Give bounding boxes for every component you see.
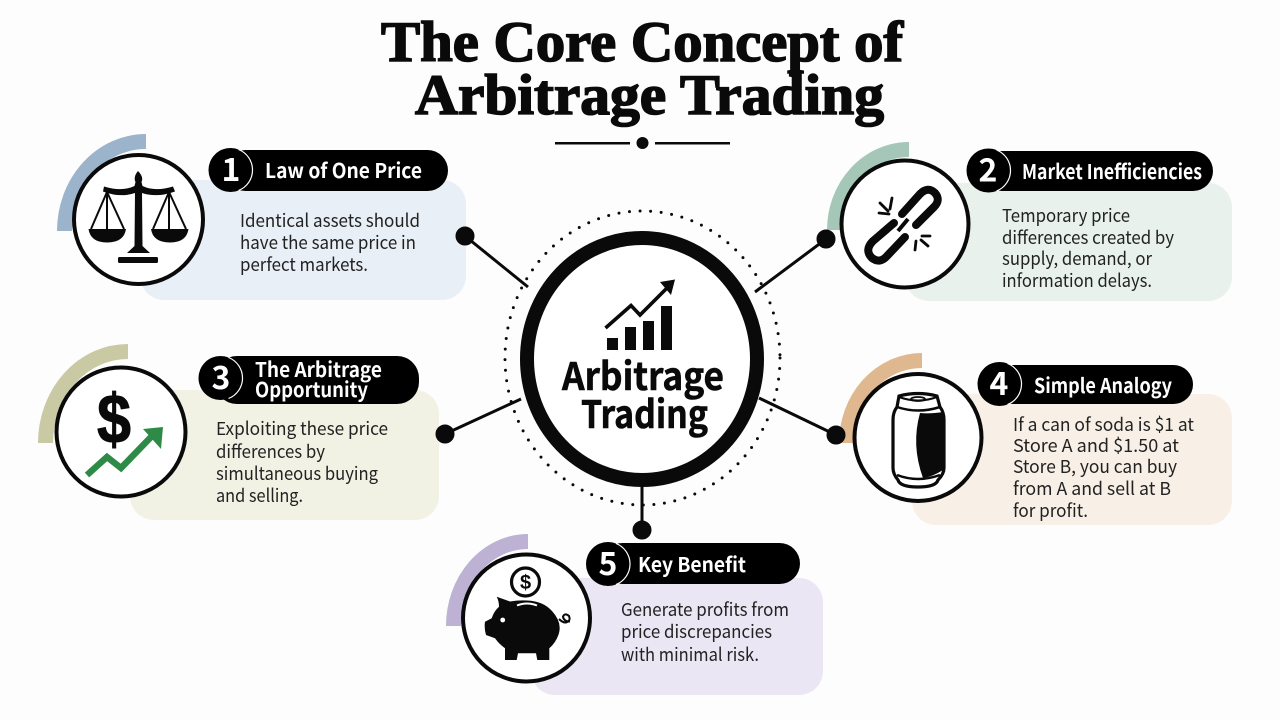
body text — [1002, 202, 1175, 293]
heading pill: Market Inefficiencies — [1022, 155, 1202, 185]
heading pill — [966, 146, 1213, 192]
heading pill — [978, 359, 1193, 406]
accent arc — [834, 150, 909, 230]
accent arc — [454, 542, 528, 626]
card — [912, 394, 1232, 525]
body text — [240, 207, 420, 277]
connector lines — [437, 228, 844, 538]
accent arc — [46, 352, 128, 443]
heading pill: Opportunity — [255, 373, 368, 403]
body text: from A and sell at B — [1013, 475, 1171, 501]
body text — [216, 415, 388, 508]
heading pill: Key Benefit — [638, 548, 746, 578]
heading pill: 3 — [212, 353, 230, 399]
icon: soda can — [854, 374, 982, 501]
body text: and selling. — [216, 482, 303, 508]
hub label: Arbitrage — [561, 346, 724, 401]
title: Arbitrage Trading — [415, 64, 884, 127]
body text: price discrepancies — [621, 618, 772, 644]
heading pill: The Arbitrage — [255, 353, 382, 383]
panel 2: Market Inefficiencies — [834, 146, 1232, 301]
body text: Generate profits from — [621, 596, 789, 622]
icon: piggy bank — [463, 554, 590, 682]
body text: If a can of soda is $1 at — [1013, 411, 1194, 437]
body text: Identical assets should — [240, 207, 420, 233]
body text: perfect markets. — [240, 251, 368, 277]
body text: Store A and $1.50 at — [1013, 432, 1179, 458]
card — [140, 180, 466, 300]
panel 3: The Arbitrage Opportunity — [46, 352, 439, 520]
body text: for profit. — [1013, 497, 1088, 523]
panel 1: Law of One Price — [64, 142, 466, 300]
icon: piggy bank: $ — [520, 572, 531, 594]
hub label — [561, 346, 724, 439]
heading pill: Simple Analogy — [1034, 369, 1172, 399]
heading pill: 1 — [222, 145, 240, 191]
heading pill: 4 — [990, 359, 1008, 405]
panel 5: Key Benefit — [454, 539, 823, 695]
icon: balance scale — [74, 155, 203, 284]
body text — [621, 596, 789, 667]
heading pill: 5 — [599, 539, 617, 585]
card — [130, 390, 439, 520]
body text: supply, demand, or — [1002, 245, 1153, 271]
hub label: Trading — [581, 384, 708, 439]
body text: with minimal risk. — [621, 641, 759, 667]
icon: dollar with green arrow — [56, 368, 186, 496]
card — [905, 183, 1232, 301]
heading pill — [198, 353, 419, 404]
heading pill: 2 — [979, 146, 997, 192]
body text: Temporary price — [1002, 202, 1130, 228]
icon: growth chart — [606, 280, 675, 350]
icon: dollar with green arrow: $ — [97, 380, 131, 458]
icon: broken chain link — [842, 160, 968, 288]
title divider — [555, 137, 730, 149]
accent arc — [64, 142, 146, 231]
dotted ring — [505, 211, 780, 505]
main ring — [527, 238, 757, 480]
body text: Exploiting these price — [216, 415, 388, 441]
accent arc — [846, 360, 922, 443]
card — [531, 578, 823, 695]
body text: have the same price in — [240, 229, 416, 255]
central hub — [505, 211, 780, 505]
panel 4: Simple Analogy — [846, 359, 1232, 525]
body text: simultaneous buying — [216, 460, 378, 486]
body text: Store B, you can buy — [1013, 453, 1178, 479]
body text: differences created by — [1002, 224, 1175, 250]
title — [381, 11, 904, 127]
heading pill — [208, 145, 448, 192]
heading pill: Law of One Price — [265, 154, 422, 184]
body text: differences by — [216, 438, 326, 464]
title: The Core Concept of — [381, 11, 904, 74]
body text — [1013, 411, 1194, 523]
body text: information delays. — [1002, 267, 1152, 293]
heading pill — [586, 539, 800, 586]
